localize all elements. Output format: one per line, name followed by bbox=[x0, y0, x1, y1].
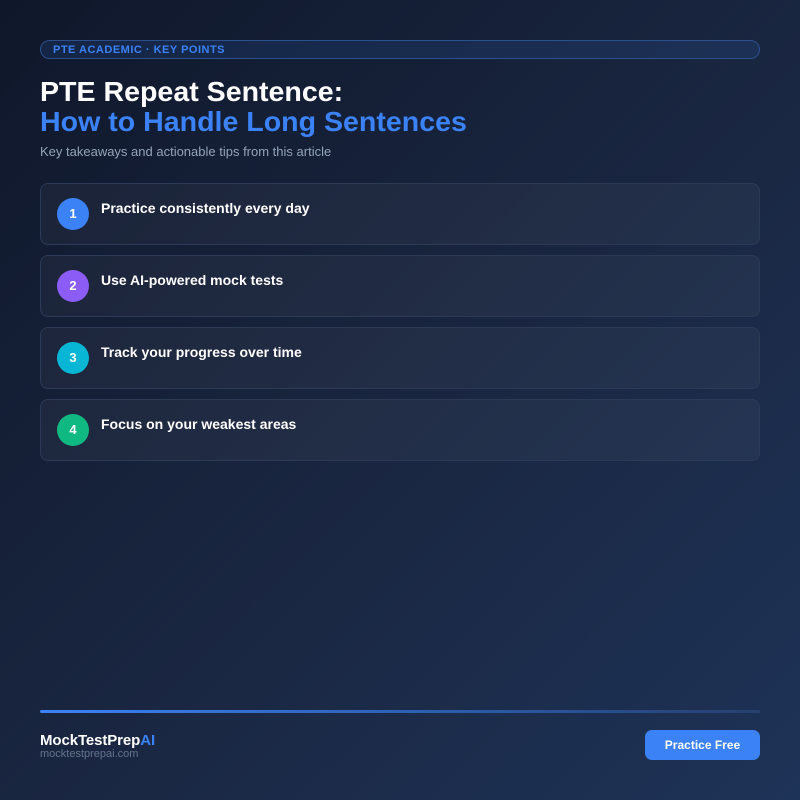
card 2 bbox=[40, 255, 760, 317]
number 4 bbox=[57, 414, 89, 446]
text 1: Practice consistently every day bbox=[101, 200, 310, 216]
text 3: Track your progress over time bbox=[101, 344, 302, 360]
text 2: Use AI-powered mock tests bbox=[101, 272, 283, 288]
badge: PTE ACADEMIC · KEY POINTS bbox=[53, 44, 225, 56]
number 2: 2 bbox=[69, 278, 77, 293]
text 4: Focus on your weakest areas bbox=[101, 416, 296, 432]
card 4 bbox=[40, 399, 760, 461]
brand: MockTestPrepAI bbox=[40, 732, 155, 749]
card 3 bbox=[40, 327, 760, 389]
button bbox=[645, 730, 760, 760]
title line 1: PTE Repeat Sentence: bbox=[40, 76, 343, 107]
card 1 bbox=[40, 183, 760, 245]
number 3: 3 bbox=[69, 350, 77, 365]
url: mocktestprepai.com bbox=[40, 748, 138, 760]
badge bbox=[40, 40, 760, 59]
number 3 bbox=[57, 342, 89, 374]
title line 2: How to Handle Long Sentences bbox=[40, 106, 467, 137]
number 1 bbox=[57, 198, 89, 230]
number 1: 1 bbox=[69, 206, 77, 221]
number 2 bbox=[57, 270, 89, 302]
button: Practice Free bbox=[665, 738, 740, 752]
number 4: 4 bbox=[69, 422, 77, 437]
subtitle: Key takeaways and actionable tips from this article bbox=[40, 144, 331, 159]
